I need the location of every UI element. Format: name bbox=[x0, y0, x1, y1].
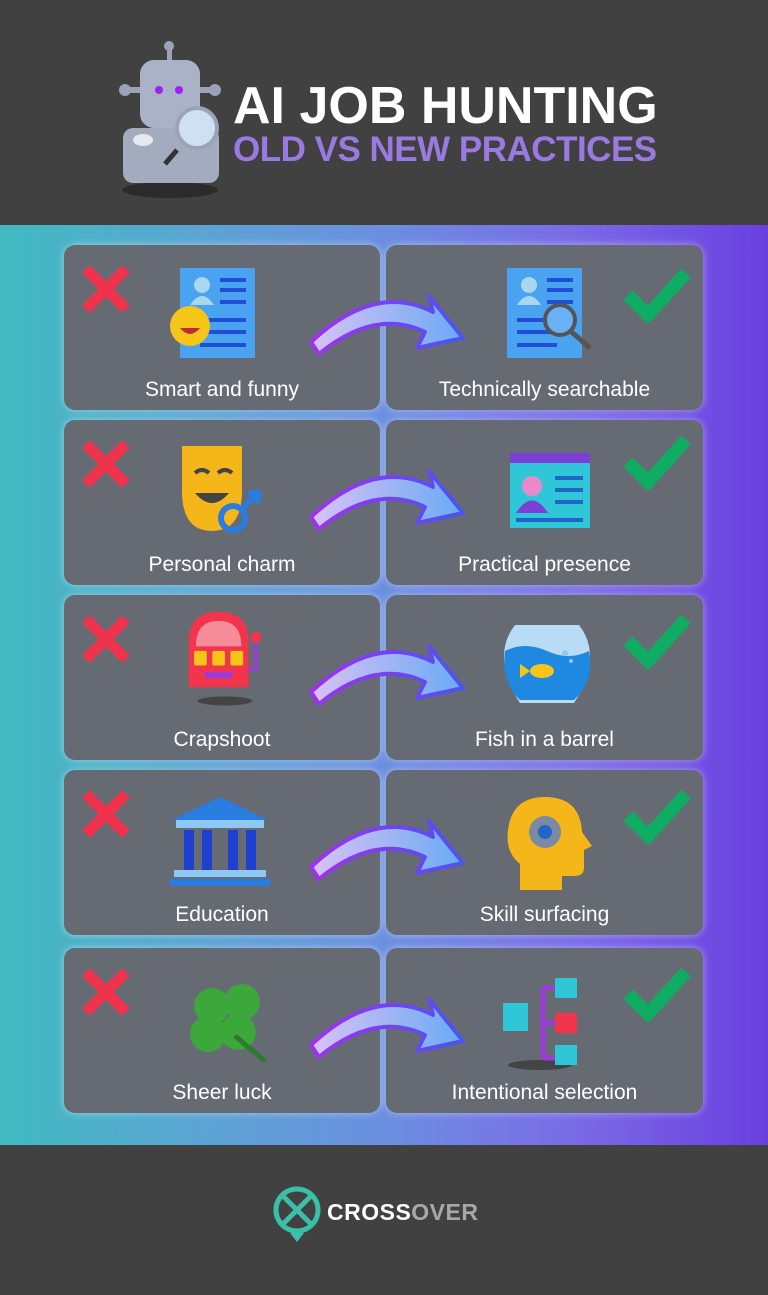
row 4 bbox=[59, 766, 708, 940]
icon: x mark bbox=[82, 440, 130, 488]
icon: robot with magnifier bbox=[119, 41, 221, 198]
logo: crossover bbox=[274, 1186, 478, 1242]
label: new: Fish in a barrel bbox=[475, 728, 614, 751]
header bbox=[0, 0, 768, 225]
icon: web profile bbox=[510, 453, 590, 528]
icon: mask and male symbol bbox=[182, 446, 261, 533]
arrow bbox=[309, 469, 466, 532]
title: AI JOB HUNTING bbox=[233, 77, 658, 135]
row 5 bbox=[59, 943, 708, 1118]
icon: resume with magnifier bbox=[507, 268, 592, 358]
icon: head with gear bbox=[508, 797, 592, 890]
icon: check bbox=[624, 614, 691, 669]
icon: x mark bbox=[82, 790, 130, 838]
row 3 bbox=[59, 590, 708, 765]
icon: check bbox=[624, 790, 691, 844]
gradient band bbox=[0, 225, 768, 1145]
arrow bbox=[309, 294, 466, 356]
arrow bbox=[309, 819, 466, 882]
subtitle: OLD VS NEW PRACTICES bbox=[233, 130, 657, 169]
logo: crossover: CROSSOVER bbox=[327, 1199, 478, 1225]
icon: x mark bbox=[82, 265, 130, 313]
icon: x mark bbox=[82, 968, 130, 1016]
footer bbox=[0, 1145, 768, 1295]
label: new: Practical presence bbox=[458, 553, 631, 576]
label: old: Education bbox=[175, 903, 269, 926]
icon: fishbowl bbox=[504, 625, 590, 703]
icon: slot machine bbox=[188, 612, 262, 706]
icon: check bbox=[624, 436, 691, 490]
label: new: Skill surfacing bbox=[480, 903, 609, 926]
arrow bbox=[309, 997, 466, 1060]
icon: check bbox=[624, 968, 691, 1022]
icon: selection diagram bbox=[503, 978, 577, 1070]
icon: four leaf clover bbox=[190, 984, 266, 1063]
label: old: Sheer luck bbox=[172, 1081, 272, 1104]
label: old: Crapshoot bbox=[174, 728, 270, 751]
row 2 bbox=[59, 416, 708, 590]
icon: institution building bbox=[170, 797, 270, 886]
row 1 bbox=[59, 240, 708, 415]
arrow bbox=[309, 644, 466, 706]
label: new: Intentional selection bbox=[452, 1081, 637, 1104]
icon: check bbox=[624, 268, 691, 323]
label: new: Technically searchable bbox=[439, 378, 650, 401]
icon: x mark bbox=[82, 615, 130, 663]
label: old: Personal charm bbox=[148, 553, 296, 576]
label: old: Smart and funny bbox=[145, 378, 299, 401]
icon: resume with emoji bbox=[170, 268, 255, 358]
